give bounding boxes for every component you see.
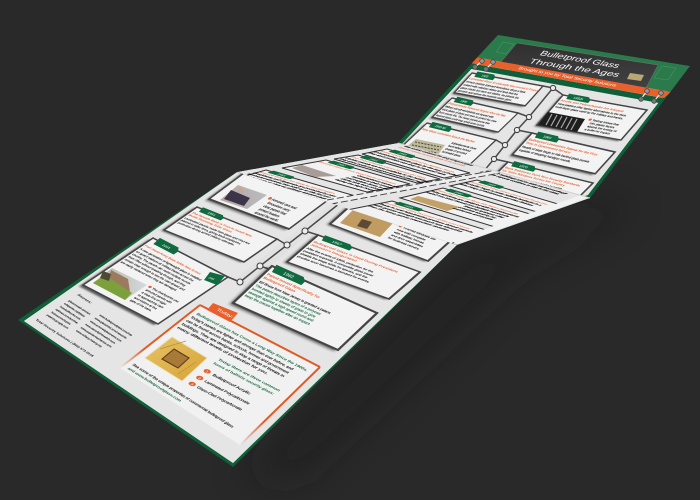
card: 1903: French chemist Edouard Benedictus drops a flask <box>465 80 527 94</box>
card: 2004: on guard stations at military bases across the <box>135 250 195 282</box>
card: second left: and register lanes to keep <box>344 177 395 191</box>
numbered list: 1 <box>204 370 210 373</box>
card: third right: 1958 <box>485 183 497 186</box>
card: 1903: process and names the material safety glass. <box>457 89 514 102</box>
card: 1945: from enemy fire. The heavy panels prove that <box>438 111 491 125</box>
card: 1951 <box>161 205 279 263</box>
sources <box>46 293 139 354</box>
card: second right: Glass Clad Products Move Into Banks Nationwide <box>434 189 520 215</box>
card: 1951: Laminated panels made from glass and vinyl are <box>183 217 252 245</box>
today text: many different levels of protection for you. <box>176 326 269 375</box>
card: third right <box>450 180 559 212</box>
card: wood photo top: Tests in new laboratories produce thinner panels <box>378 203 476 233</box>
card: 2004: are easily replaced when they are damaged. <box>119 261 179 292</box>
card: third right: Transparent Armor Enters Commercial Production <box>468 181 549 205</box>
year tab <box>270 265 308 285</box>
numbered list: 2 <box>197 376 203 380</box>
card: man photo top: Armored Vehicles Are Made for World Leaders <box>257 171 337 194</box>
card: second left: 1990 <box>335 163 348 167</box>
sources: www.popularmechanics.com <box>79 326 114 348</box>
card: 1967: president expands. A composite glass panel <box>302 250 374 277</box>
lower green stripe <box>466 63 663 103</box>
card: wood photo: and door assemblies <box>390 234 424 248</box>
card: 1970 <box>496 161 594 196</box>
card: 2004: armored panels with <box>144 289 173 304</box>
card: man photo: around the world. <box>253 211 280 222</box>
sources: www.bulletproofglass.com/info <box>98 314 134 337</box>
small green label: 2008 <box>207 276 216 281</box>
card: 2004 <box>79 235 231 326</box>
card: wood photo <box>327 196 458 262</box>
card: wood photo: for business owners. <box>387 236 421 250</box>
image: newspaper clipping <box>408 139 445 154</box>
fold highlight right <box>451 194 590 244</box>
card: 2004: gate of the base. <box>129 299 153 312</box>
today text: can be found across banks, schools, homes and government <box>185 319 291 375</box>
card: 1967 <box>284 233 422 300</box>
year tab: 1967 <box>331 240 344 246</box>
card: wood photo top: with greater strength and much less distortion <box>371 204 465 232</box>
today website note: See some of the unique properties of commercial bulletproof glass <box>131 363 235 429</box>
card: 1903 <box>452 71 545 107</box>
sources: glassonweb.com/art <box>67 299 92 315</box>
card: 1945: layered glass could stop small arms rounds. <box>435 113 487 128</box>
card: second right: complete security for <box>456 207 499 219</box>
card: 2004: A new generation of lightweight glass is installed <box>139 248 203 281</box>
sources: patents.google.com <box>46 314 70 330</box>
card: 1945 <box>430 96 520 134</box>
card: fourth left: that each product can stop in repeated tests <box>367 152 449 175</box>
paper shadow <box>240 200 640 480</box>
card: third left: 1995 <box>367 158 380 162</box>
card: 2004: a clear line of sight <box>140 291 167 306</box>
card: 2004: to approaching cars <box>137 294 165 309</box>
title text: Bulletproof Glass <box>537 50 622 70</box>
card: 1970: for Teller Windows Across the Country <box>501 169 566 187</box>
today text: forms of ballistic security glass: <box>212 362 276 396</box>
binder rings <box>473 59 663 103</box>
image: wood frame <box>340 210 393 237</box>
card: 1903: glass cracks but does not shatter. He patents the <box>460 86 521 100</box>
card: second left <box>282 160 420 193</box>
card: 1940-50: bank tellers behind <box>447 144 472 153</box>
card: 1960 <box>509 130 617 175</box>
timeline nodes bottom <box>237 228 308 285</box>
year tab: 1960 <box>542 135 552 140</box>
card: 1960: Bulletproof Limousines Appear for the First <box>527 138 599 157</box>
card: 1951: placed in teller lines, giving bank employees <box>180 219 242 245</box>
card: wood photo: now sold complete <box>396 228 427 241</box>
card: 1967: Johnson's Inauguration <box>309 243 359 263</box>
card: 1950s: absorb the energy of <box>586 125 618 133</box>
today tab <box>207 303 238 322</box>
card: 1982 <box>229 263 379 352</box>
card: 1960: Heads of state begin to ride behind glass panels <box>521 145 591 164</box>
card: 1950s: a bullet on impact. <box>583 128 612 135</box>
card: man photo top: Presidents and diplomats are protected by new <box>252 172 339 197</box>
card: 1945: Polycarbonate Research Begins After the War <box>447 102 508 118</box>
orange border <box>120 305 320 445</box>
card: 1967: After the events of 1963, protection for the <box>305 247 375 273</box>
bullet <box>398 225 403 228</box>
bottom panel <box>24 167 458 463</box>
sources: www.military-history.org <box>75 329 104 348</box>
numbered list: Laminated Polycarbonate <box>203 380 251 405</box>
sources: Sources: <box>76 293 93 304</box>
card: 1950s: Testing shows that <box>591 119 620 126</box>
card: 1950s: Acrylic and Polycarbonate Are Adopted <box>560 99 625 113</box>
sources: nytimes.com/archive <box>54 308 80 325</box>
card: 2004: Fort Hood Army Base Adds New Armor <box>144 244 203 276</box>
card: man photo: limousines carry <box>266 201 292 212</box>
card: second right: sealed into steel frames and ballistic surrounds <box>423 191 512 217</box>
card: 1940-50: laminated glass. <box>441 150 463 158</box>
title text: Through the Ages <box>526 58 622 79</box>
card: 2004: from rifles without breaking through, and they <box>127 255 187 287</box>
today text: Today's panels are lighter and stronger than ever before, and <box>189 315 295 371</box>
card: second left: during the night hours <box>333 179 377 191</box>
today text: buildings. They are designed to stop a range of threats in <box>181 322 286 378</box>
card: 1945: thick plates of glass and resin to protect the crew <box>441 108 499 123</box>
sources: wikipedia.org/glass <box>63 302 87 318</box>
card: 1967: shields the stage while he speaks, and the <box>299 252 369 279</box>
card: second left: barriers at their counters <box>350 176 398 189</box>
image: bullets photo <box>538 112 585 132</box>
card: second left: Convenience stores add <box>355 175 403 188</box>
sources: howstuffworks.com <box>59 305 83 321</box>
card: 1982: The patent describes layers of a polymer <box>254 284 323 316</box>
card: 1982: Patent Issued Specifically for <box>266 272 322 299</box>
footer contact: Total Security Solutions | (866) 573-0018 <box>34 318 95 358</box>
card: fourth left <box>362 149 474 178</box>
card: 1967: Bulletproof Glass is Used During President <box>312 241 399 274</box>
panel: today <box>120 303 320 445</box>
image: landscape <box>93 268 147 300</box>
card: third left: that once could not support armored glass walls <box>338 158 427 184</box>
card: third left: Thin Polycarbonate Layers Improve the Glass <box>349 156 428 179</box>
card: 2004: remain clear enough to see the road ahead and <box>123 258 186 291</box>
timeline nodes top <box>491 85 556 162</box>
sources: www.glasslinks.com/newsinfo <box>93 317 129 340</box>
timeline spine top <box>483 86 563 172</box>
card: second right: Teller windows are designed with laminated panes <box>429 190 523 218</box>
card: 1950s: multi-layer glass used by the military and banks. <box>554 105 625 120</box>
card: 2004: The checkpoints use <box>151 287 180 303</box>
image: gold glass sample <box>145 337 207 381</box>
year tab: 1945 <box>459 99 469 104</box>
card: wood photo top: than the heavy panes of previous decades <box>367 205 452 231</box>
card: second right <box>400 188 537 227</box>
card: man photo: protect leaders <box>257 208 281 218</box>
card: wood photo top <box>347 201 490 245</box>
card: wood photo: Framed windows are <box>403 227 437 241</box>
card: 1970: Federal rules encourage the banks to install <box>498 172 563 190</box>
continuation of card above fold: Security industry expands rapidly in the seventies <box>397 147 468 167</box>
card: third left <box>334 155 447 184</box>
header pattern <box>496 42 676 80</box>
image: men in suits <box>220 185 267 209</box>
card: 1982: bonded tightly to sheets of glass to give <box>251 287 317 318</box>
image: compressed wood photo <box>410 196 460 211</box>
bullet <box>267 197 273 200</box>
card: second right: employees and guests <box>451 207 496 220</box>
card: man photo: Armored cars and <box>270 198 298 210</box>
card: 1982: keep the pieces together after an impact. <box>244 294 312 326</box>
card: 1951: The Nevada Bank is First to Install New <box>191 211 254 238</box>
numbered list: Bulletproof Acrylic <box>211 373 253 396</box>
card: 1960: Time in Government Service <box>524 141 572 154</box>
card: 1967: practice soon becomes a standard for events. <box>296 255 371 283</box>
sources: www.armoredglassnews.com <box>89 320 124 343</box>
card: 1903: Laminated Glass Accidentally Discovered in France <box>468 77 540 93</box>
top panel <box>402 35 690 196</box>
year tab: 1982 <box>281 271 296 280</box>
today text: Today there are three common <box>217 358 282 392</box>
middle panel <box>237 143 590 245</box>
year tab: 2004 <box>161 244 171 250</box>
card: 1951: protection during armed robbery attempts. <box>176 221 236 246</box>
sources: www.securityinfowatch.com <box>84 323 117 345</box>
continuation of card above fold: This section continues the story of layered glass <box>402 146 475 166</box>
bullet <box>147 285 153 288</box>
card: fourth left: 1998 <box>396 152 409 156</box>
continuation of 1970 card: as crime reports continue to rise in the cities <box>479 171 562 195</box>
numbered list <box>187 368 260 411</box>
card: 1951: Bullet Resisting Teller Glass <box>187 214 234 233</box>
card: fourth left: Rating Levels Are Defined for Ballistic Panels <box>378 150 456 173</box>
card: second right: Framing systems offer <box>462 206 507 218</box>
card: wood photo top: 1965 <box>402 205 417 209</box>
card: 2004: and visitors at the <box>133 296 158 310</box>
card: 1940-50: New Glass Laminates Reach the Market <box>421 128 476 143</box>
card: 2004: country. The panels can resist multiple rounds <box>131 253 192 285</box>
today text: Bulletproof Glass has Come a Long Way Since the 1900s. <box>195 312 309 372</box>
card: third left: Lighter panels are now available to the buildings <box>344 157 433 183</box>
year tab: 1940-50 <box>433 124 447 130</box>
header green band <box>475 35 690 92</box>
card: third right: wider range of thicknesses and clear finishes <box>456 183 535 206</box>
sources: history.com/topics <box>50 311 73 326</box>
year tab <box>152 238 182 255</box>
card: wood photo: with ballistic frames <box>393 231 425 245</box>
card: man photo top: remain nearly as clear as ordinary window glass <box>241 174 329 199</box>
orange band <box>470 57 671 98</box>
card: 1950s <box>534 93 649 142</box>
card: 1940-50 <box>402 122 498 164</box>
card: wood photo top: Bulletproof Glass Becomes Lighter and Clearer <box>383 203 472 229</box>
card: 1940-50: Advertisements show <box>450 141 479 151</box>
card: 1945: Military aircraft windshields are layered with <box>444 105 496 119</box>
card: second left: Security Glass Enters Retail Stores and Homes <box>317 161 398 185</box>
numbered list: 3 <box>189 382 195 386</box>
title panel <box>501 43 658 88</box>
card: man photo <box>206 167 332 231</box>
year tab: 1970 <box>518 164 529 169</box>
card: 1940-50: sheets of armored <box>444 147 468 155</box>
card: third right: Factories begin to make ballistic laminates in a <box>462 182 544 206</box>
image: compressed photo <box>292 165 336 177</box>
card: second right: 1960 <box>452 191 466 195</box>
card: second left: clerks safe from robberies <box>339 178 389 192</box>
card: man photo top <box>238 170 354 205</box>
card: 1903: coated with cellulose nitrate and finds that the <box>462 83 520 96</box>
subtitle: Brought to you by Total Security Solutions <box>517 66 618 88</box>
card: man photo: clear panels that <box>262 205 287 216</box>
card: 1950s: thin plastic layers <box>589 122 616 129</box>
today text <box>138 312 309 416</box>
year tab: 1951 <box>206 211 217 217</box>
today tab: Today: <box>215 308 235 319</box>
continuation of 1970 card: of their buildings and to train staff accordingly <box>485 170 571 195</box>
card: 1982: Bulletproof Glass <box>262 276 298 293</box>
today website note: and www.bulletproofglass.com <box>127 367 183 402</box>
title text <box>531 50 620 77</box>
card: 1970: Bank Robberies Push New Security Standards <box>504 166 581 187</box>
timeline spine bottom <box>228 201 343 287</box>
card: 1950s: New plastics offer lighter alternatives to the thick <box>557 102 628 117</box>
year tab: 1903 <box>480 74 490 78</box>
card: 1960: capable of stopping handgun rounds. <box>518 148 572 163</box>
card: 1982: Ed Bruce from New Jersey is granted a patent. <box>258 280 332 315</box>
compressed spine strip <box>327 170 500 204</box>
fold highlight top <box>398 143 590 198</box>
card: fourth left: Laboratories classify glass by the type of bullet <box>373 151 460 176</box>
card: 1982: strength against a high speed round and <box>247 291 314 322</box>
icon: glass sample <box>627 73 644 81</box>
small green label <box>204 272 225 285</box>
bullet <box>588 118 592 121</box>
card: man photo top: laminated windows that hold up to rifle fire and <box>246 173 333 198</box>
numbered list: Glass-Clad Polycarbonate <box>196 386 244 411</box>
card: man photo top: 1985 <box>275 173 288 177</box>
year tab: 1950s <box>572 96 585 101</box>
